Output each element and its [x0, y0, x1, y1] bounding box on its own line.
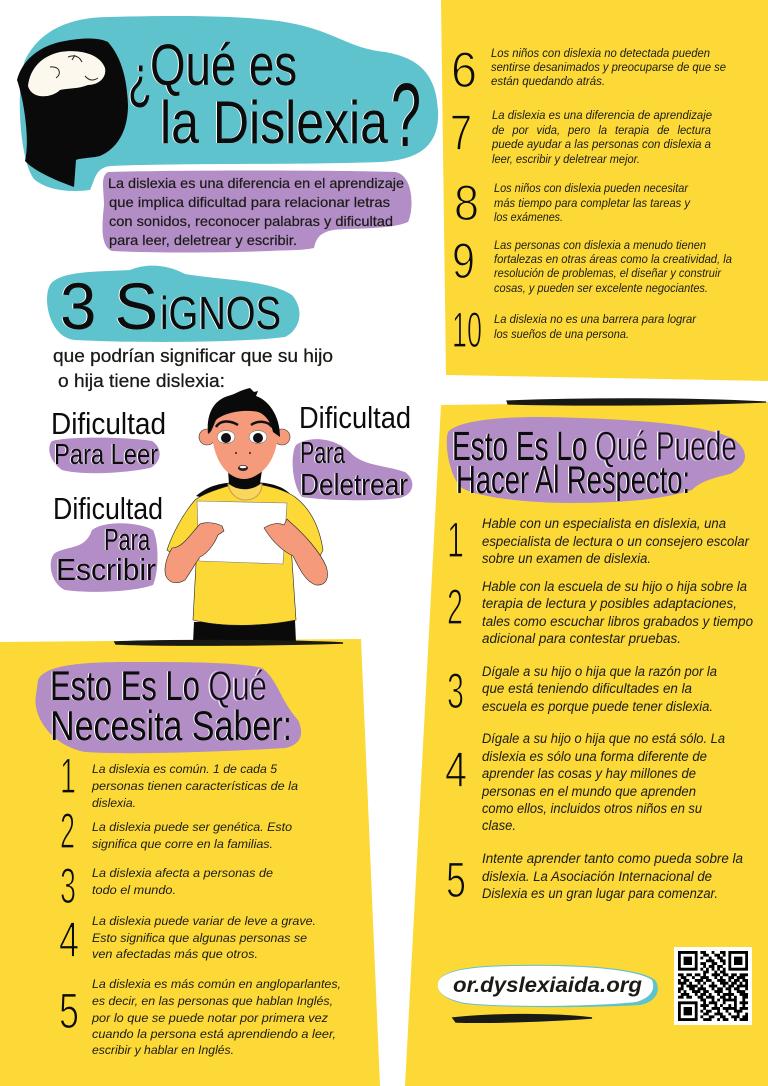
list: action item 4: Dígale a su hijo o hija que no está sólo. La — [482, 731, 725, 746]
title teal blob — [20, 16, 438, 191]
title text: ¿ — [128, 43, 152, 110]
list: need to know item 1 — [60, 748, 298, 810]
list: need to know item 4: 4 — [59, 912, 79, 968]
sign: difficulty writing: Dificultad — [53, 491, 163, 526]
list: action item 4: aprender las cosas y hay millones de — [482, 766, 696, 781]
boy hair — [208, 388, 280, 437]
list: item 10 — [452, 302, 697, 358]
list: item 10: los sueños de una persona. — [494, 329, 629, 341]
list: item 7: La dislexia es una diferencia de aprendizaje — [492, 110, 712, 122]
list: item 7: de por vida, pero la terapia de lectura — [492, 125, 711, 137]
boy right arm and hand — [264, 519, 328, 585]
list: need to know item 5: 5 — [59, 983, 79, 1039]
list: action item 2: 2 — [447, 579, 463, 635]
list: action item 4: clase. — [482, 818, 516, 833]
list: item 10: La dislexia no es una barrera para lograr — [494, 314, 697, 326]
boy left arm and hand — [165, 523, 224, 583]
list: action item 2: adicional para contestar pruebas. — [482, 631, 681, 646]
list: action item 2 — [447, 579, 753, 646]
boy neck shadow — [228, 470, 262, 489]
sign: difficulty writing: Para — [104, 522, 151, 557]
list: item 6: están quedando atrás. — [491, 76, 605, 88]
list: action item 1: especialista de lectura o un consejero escolar — [482, 534, 749, 549]
boy shirt — [167, 485, 323, 625]
panel: what you can do yellow — [405, 402, 768, 1086]
website link pill: or.dyslexiaida.org — [453, 974, 642, 997]
list: need to know item 2: significa que corre en la familias. — [92, 839, 273, 851]
list: item 7 — [450, 105, 712, 166]
signs heading — [47, 266, 299, 343]
brush stroke above action panel — [507, 399, 766, 405]
list: item 8: 8 — [454, 175, 479, 231]
QR code — [674, 947, 752, 1025]
list: action item 1: Hable con un especialista en dislexia, una — [482, 516, 726, 531]
sign: difficulty spelling — [293, 400, 412, 502]
list: action item 3: Dígale a su hijo o hija que la razón por la — [482, 664, 717, 679]
list: item 9 — [452, 233, 732, 295]
title text: Qué es — [150, 33, 297, 98]
intro purple text box — [102, 170, 412, 252]
list: item 7: leer, escribir y deletrear mejor. — [492, 154, 640, 166]
list: need to know item 1: La dislexia es común. 1 de cada 5 — [92, 764, 278, 776]
list: need to know item 2 — [60, 803, 293, 859]
list: item 9: resolución de problemas, el diseñar y construir — [494, 268, 722, 280]
list: item 10: 10 — [452, 302, 482, 358]
sign: difficulty reading: Dificultad — [51, 406, 166, 441]
list: need to know item 5: por lo que se puede notar por primera vez — [91, 1013, 328, 1025]
list: action item 2: tales como escuchar libros grabados y tiempo — [482, 614, 753, 629]
signs subtitle: que podrían significar que su hijo — [53, 346, 333, 366]
heading: what you need to know — [35, 662, 301, 753]
list: need to know item 5: cuando la persona está aprendiendo a leer, — [92, 1029, 336, 1041]
signs heading: iGNOS — [160, 287, 281, 339]
website link pill — [438, 965, 658, 1007]
heading: what you need to know: Esto Es Lo Qué — [50, 662, 267, 709]
signs subtitle: o hija tiene dislexia: — [58, 371, 225, 391]
boy eyes and brows — [216, 421, 272, 444]
boy ears — [199, 429, 290, 445]
list: action item 5 — [446, 851, 743, 908]
list: item 6: Los niños con dislexia no detectada pueden — [491, 48, 710, 60]
list: action item 5: dislexia. La Asociación Internacional de — [482, 869, 712, 884]
list: action item 3: 3 — [447, 663, 464, 719]
list: need to know item 5: La dislexia es más común en angloparlantes, — [92, 979, 341, 991]
list: need to know item 5: escribir y hablar en Inglés. — [92, 1045, 234, 1057]
title text — [128, 33, 421, 166]
panel: what you need to know yellow — [0, 639, 380, 1086]
list: need to know item 4: ven afectadas más que otros. — [92, 949, 258, 961]
list: need to know item 3: todo el mundo. — [92, 885, 176, 897]
intro purple text box: que implica dificultad para relacionar letras — [109, 194, 390, 210]
boy nose and mouth — [235, 452, 251, 471]
list: action item 5: Intente aprender tanto como pueda sobre la — [482, 851, 743, 866]
list: item 6 — [451, 42, 726, 98]
sign: difficulty spelling: Para — [300, 435, 346, 470]
list: action item 4 — [445, 731, 725, 833]
intro purple text box: con sonidos, reconocer palabras y dificultad — [109, 213, 393, 229]
list: need to know item 2: 2 — [60, 803, 75, 859]
list: need to know item 5: es decir, en las personas que hablan Inglés, — [92, 996, 333, 1008]
intro purple text box: para leer, deletrear y escribir. — [109, 232, 297, 248]
list: item 9: fortalezas en otras áreas como la creatividad, la — [494, 254, 732, 266]
list: item 8: Los niños con dislexia pueden necesitar — [494, 183, 689, 195]
list: action item 4: 4 — [445, 742, 467, 798]
sign: difficulty spelling: Deletrear — [300, 467, 408, 502]
list: action item 5: 5 — [446, 852, 466, 908]
boy face — [212, 409, 278, 479]
list: item 9: 9 — [452, 233, 475, 289]
list: item 8: los exámenes. — [494, 212, 563, 224]
sign: difficulty writing: Escribir — [56, 552, 156, 587]
signs subtitle — [53, 346, 333, 391]
list: action item 4: personas en el mundo que aprenden — [481, 784, 696, 799]
list: need to know item 2: La dislexia puede ser genética. Esto — [92, 822, 293, 834]
list: need to know item 1: personas tienen características de la — [91, 781, 298, 793]
list: item 9: Las personas con dislexia a menudo tienen — [494, 240, 706, 252]
list: need to know item 4 — [59, 912, 316, 968]
list: action item 3: que está teniendo dificultades en la — [482, 681, 692, 696]
list: need to know item 4: Esto significa que algunas personas se — [92, 933, 307, 945]
sign: difficulty reading — [49, 406, 166, 473]
title text: la Dislexia — [160, 89, 389, 156]
sign: difficulty writing — [51, 491, 163, 592]
list: item 7: 7 — [450, 105, 472, 161]
title text: ? — [391, 66, 421, 166]
list: action item 4: dislexia es sólo una forma diferente de — [482, 749, 707, 764]
sign: difficulty reading: Para Leer — [54, 439, 158, 471]
sign: difficulty spelling: Dificultad — [299, 400, 411, 435]
intro purple text box: La dislexia es una diferencia en el aprendizaje — [108, 175, 404, 191]
list: item 8 — [454, 175, 691, 231]
list: need to know item 3: La dislexia afecta a personas de — [92, 868, 273, 880]
list: action item 3 — [447, 663, 717, 719]
list: item 9: cosas, y pueden ser excelente negociantes. — [494, 283, 708, 295]
boy shoulders outline — [196, 482, 292, 510]
boy trousers — [193, 620, 296, 643]
boy paper — [197, 501, 287, 564]
list: need to know item 5 — [59, 979, 341, 1057]
list: action item 1: 1 — [447, 512, 464, 568]
list: action item 3: escuela es porque puede tener dislexia. — [482, 699, 713, 714]
list: item 6: sentirse desanimados y preocuparse de que se — [491, 62, 726, 74]
title block — [17, 16, 438, 191]
list: need to know item 3: 3 — [60, 858, 76, 914]
panel: top right yellow — [441, 0, 768, 381]
list: action item 2: terapia de lectura y posibles adaptaciones, — [482, 596, 737, 611]
list: need to know item 3 — [60, 858, 273, 914]
list: action item 1 — [447, 512, 749, 568]
boy collar — [228, 484, 262, 500]
list: need to know item 4: La dislexia puede variar de leve a grave. — [92, 916, 316, 928]
list: item 8: más tiempo para completar las tareas y — [494, 198, 691, 210]
list: item 7: puede ayudar a las personas con dislexia a — [491, 139, 711, 151]
heading: what you can do — [447, 417, 745, 503]
list: need to know item 1: dislexia. — [92, 798, 136, 810]
brush stroke under illustration — [115, 641, 343, 645]
heading: what you need to know: Necesita Saber: — [50, 702, 292, 749]
list: action item 5: Dislexia es un gran lugar para comenzar. — [482, 886, 718, 901]
list: action item 2: Hable con la escuela de su hijo o hija sobre la — [482, 579, 747, 594]
list: action item 4: como ellos, incluidos otros niños en su — [482, 801, 702, 816]
brush stroke under link — [453, 1015, 592, 1022]
list: need to know item 1: 1 — [60, 748, 76, 804]
illustration: boy reading a sheet — [165, 388, 328, 643]
signs heading: 3 S — [60, 269, 158, 343]
list: item 6: 6 — [451, 42, 477, 98]
list: action item 1: sobre un examen de dislexia. — [482, 551, 651, 566]
icon: head silhouette with brain — [17, 38, 128, 187]
